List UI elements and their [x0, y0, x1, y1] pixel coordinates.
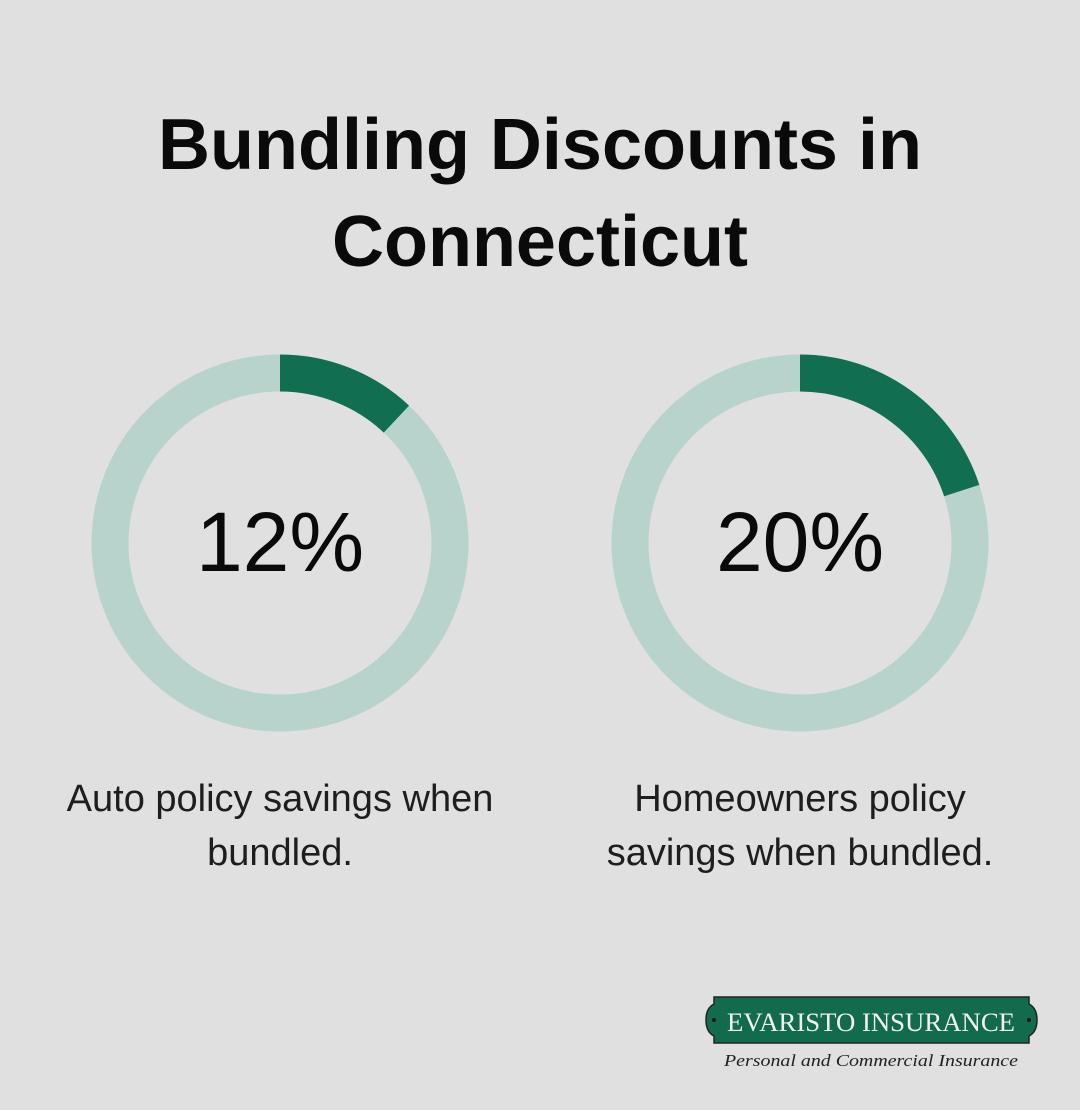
- caption: auto: [66, 778, 493, 874]
- donut: 12% auto: 12%: [196, 495, 364, 589]
- caption: homeowners: Homeowners policy: [634, 778, 966, 820]
- donut: 20% homeowners: 20%: [716, 495, 884, 589]
- caption: homeowners: savings when bundled.: [607, 832, 993, 874]
- title: Bundling Discounts in: [158, 105, 922, 185]
- logo: [706, 997, 1037, 1070]
- donut: 12% auto: [110, 373, 450, 713]
- logo: EVARISTO INSURANCE: [727, 1008, 1015, 1037]
- caption: homeowners: [607, 778, 993, 874]
- caption: auto: bundled.: [207, 832, 353, 874]
- title: [158, 105, 922, 282]
- logo: Personal and Commercial Insurance: [723, 1051, 1019, 1070]
- title: Connecticut: [332, 202, 748, 282]
- donut: 20% homeowners: [630, 373, 970, 713]
- caption: auto: Auto policy savings when: [67, 778, 493, 820]
